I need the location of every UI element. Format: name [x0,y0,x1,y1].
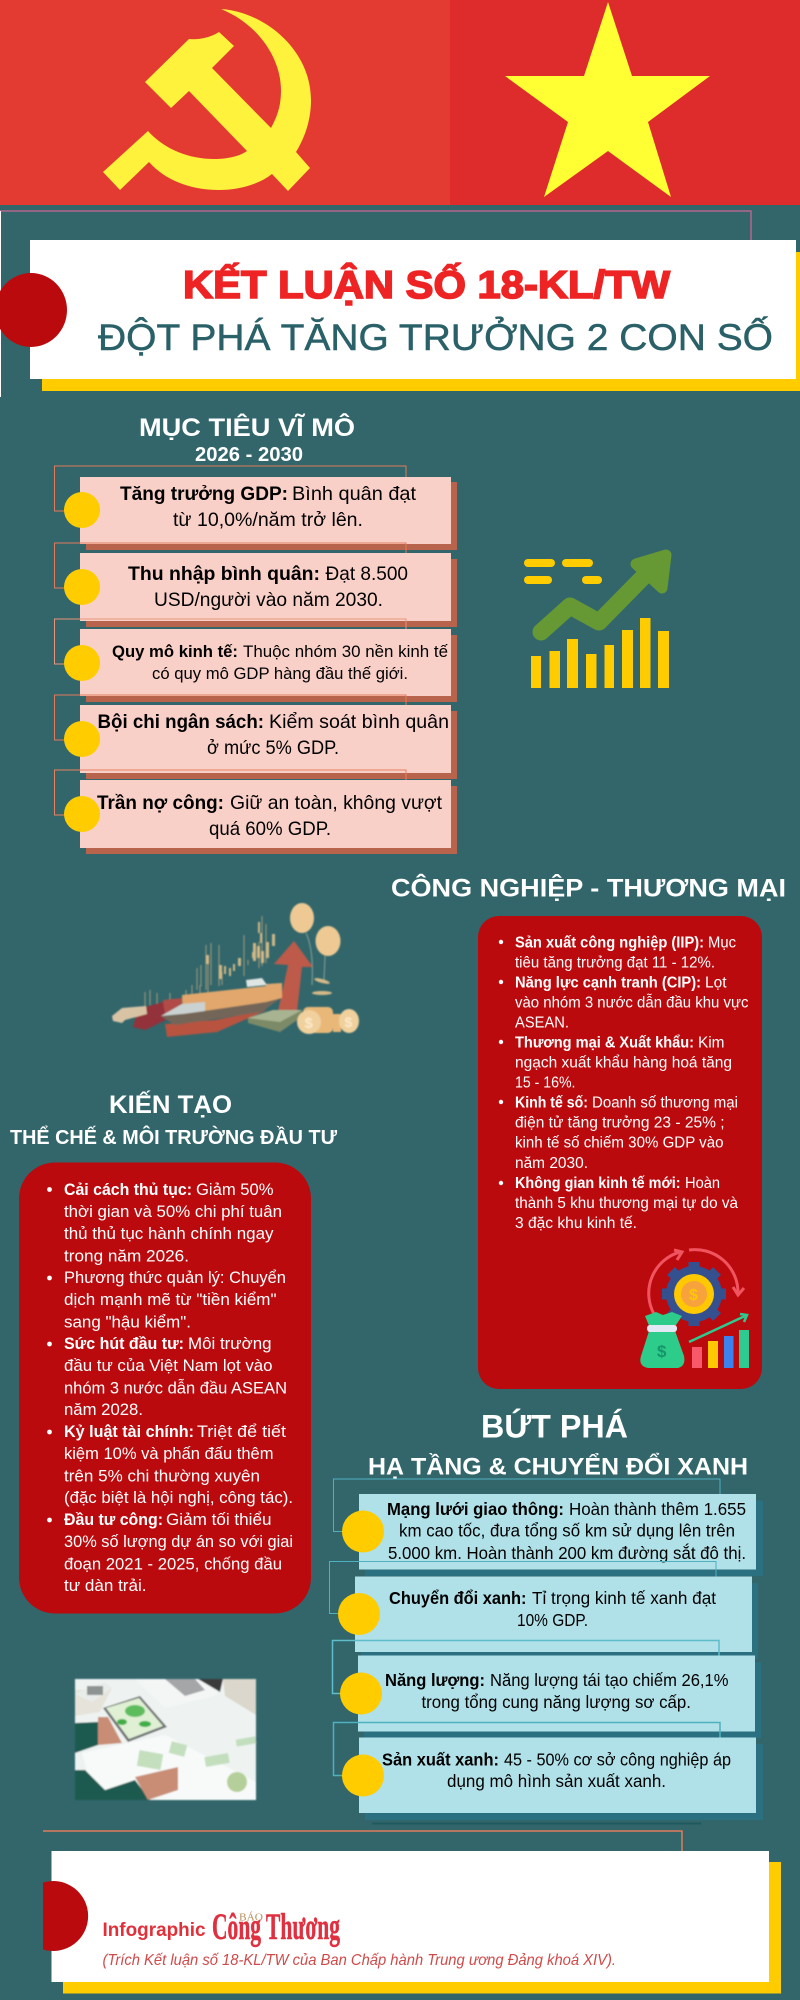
card: public debt ceiling: Giữ an toàn, không vượt [230,792,443,814]
title panel [0,211,800,397]
icon: yellow star [505,2,710,197]
panel: institutions and investment targets: Môi trường [188,1334,272,1353]
subtitle: ĐỘT PHÁ TĂNG TRƯỞNG 2 CON SỐ [98,316,773,358]
bullet list: tiêu tăng trưởng đạt 11 - 12%. [515,954,715,972]
card: green transition: Tỉ trọng kinh tế xanh đạt [532,1588,716,1608]
panel: institutions and investment targets: 30% số lượng dự án so với giai [64,1532,293,1551]
logo: Infographic Báo Công Thương: Công Thương [212,1907,340,1948]
card: GDP growth: từ 10,0%/năm trở lên. [173,509,363,531]
bullet list: Lọt [705,974,727,992]
panel: infrastructure cards [330,1479,763,1824]
panel: institutions and investment targets: Cải cách thủ tục: [64,1180,192,1199]
panel: institutions and investment targets: tư dàn trải. [64,1576,146,1595]
logo: Infographic Báo Công Thương: Infographic [102,1920,206,1941]
heading: industry and trade: CÔNG NGHIỆP - THƯƠNG MẠI [391,872,786,902]
heading: institutions and investment environment [10,1090,337,1149]
heading: infrastructure and green transition: HẠ TẦNG & CHUYỂN ĐỔI XANH [368,1452,748,1480]
panel: institutions and investment targets: nhóm 3 nước dẫn đầu ASEAN [64,1378,287,1398]
card: green production: 45 - 50% cơ sở công nghiệp áp [504,1750,731,1770]
card: green transition: 10% GDP. [517,1610,588,1630]
card: energy: Năng lượng tái tạo chiếm 26,1% [490,1670,728,1690]
bullet list: vào nhóm 3 nước dẫn đầu khu vực [515,994,749,1012]
heading: macro targets [139,412,355,466]
card: GDP growth: Tăng trưởng GDP: [120,483,288,505]
card: GDP growth [54,466,457,550]
card: energy: Năng lượng: [385,1670,485,1690]
panel: institutions and investment targets: thủ thủ tục hành chính ngay [64,1224,274,1243]
card: economy scale: Thuộc nhóm 30 nền kinh tế [243,642,449,661]
bullet list: Hoàn [685,1175,720,1192]
panel: institutions and investment targets: Phương thức quản lý: Chuyển [64,1268,286,1287]
heading: macro targets: 2026 - 2030 [195,444,303,466]
panel: institutions and investment targets: năm 2028. [64,1400,143,1419]
card: average income: Đạt 8.500 [326,563,408,585]
card: transport network [334,1479,763,1576]
card: transport network: Hoàn thành thêm 1.655 [569,1499,746,1519]
card: budget deficit: ở mức 5% GDP. [207,737,339,759]
bullet list: Năng lực cạnh tranh (CIP): [515,974,701,992]
icon: growth chart [524,555,669,688]
card: energy: trong tổng cung năng lượng sơ cấp. [422,1692,691,1712]
heading: infrastructure and green transition [368,1408,748,1480]
card: transport network: 5.000 km. Hoàn thành 200 km đường sắt đô thị. [388,1542,746,1563]
panel: institutions and investment targets: thời gian và 50% chi phí tuân [64,1202,282,1221]
bullet list: 15 - 16%. [515,1074,576,1092]
panel: institutions and investment targets: Triệt để tiết [197,1422,286,1441]
banner: party and national flags [0,0,800,205]
panel: institutions and investment targets: trong năm 2026. [64,1246,189,1266]
photo: hand holding phone over reports [75,1679,257,1800]
panel: institutions and investment targets: Đầu tư công: [64,1510,163,1529]
panel: institutions and investment targets: (đặc biệt là hội nghị, công tác). [64,1488,293,1507]
bullet list: Kim [698,1034,724,1052]
bullet list: ngạch xuất khẩu hàng hoá tăng [515,1054,732,1072]
card: public debt ceiling: Trần nợ công: [97,792,224,814]
heading: infrastructure and green transition: BỨT PHÁ [481,1408,628,1444]
card: average income: USD/người vào năm 2030. [154,589,383,611]
card: public debt ceiling [54,770,457,854]
card: green transition: Chuyển đổi xanh: [389,1588,526,1608]
panel: industry and trade targets [478,916,762,1389]
bullet list: Sản xuất công nghiệp (IIP): [515,934,704,952]
illustration: ship, arrow, balloons and coins: $ [304,1015,314,1032]
panel: footer source [43,1831,781,1994]
panel: institutions and investment targets: Giảm tối thiểu [166,1510,272,1529]
bullet list: thành 5 khu thương mại tự do và [515,1195,738,1212]
card: green production: dụng mô hình sản xuất xanh. [447,1771,666,1791]
bullet list: Thương mại & Xuất khẩu: [515,1034,694,1052]
card: green production: Sản xuất xanh: [382,1750,499,1770]
card: energy [332,1640,761,1738]
bullet list [499,934,749,1232]
card: average income: Thu nhập bình quân: [128,563,320,585]
card: budget deficit: Bội chi ngân sách: [98,711,264,733]
card: budget deficit: Kiểm soát bình quân [269,711,449,733]
panel: institutions and investment targets: Giảm 50% [196,1180,274,1199]
title: KẾT LUẬN SỐ 18-KL/TW [183,262,670,307]
card: green transition [330,1562,758,1659]
illustration: ship, arrow, balloons and coins: $ [344,1014,352,1030]
logo: Infographic Báo Công Thương [102,1907,340,1948]
card: transport network: km cao tốc, đưa tổng số km sử dụng lên trên [399,1520,735,1540]
card: green production [334,1722,763,1824]
panel: institutions and investment targets: dịch mạnh mẽ từ "tiền kiểm" [64,1290,276,1309]
panel: institutions and investment targets: trên 5% chi thường xuyên [64,1466,260,1486]
bullet list: kinh tế số chiếm 30% GDP vào [515,1134,724,1152]
card: public debt ceiling: quá 60% GDP. [209,818,331,840]
panel: institutions and investment targets: kiệm 10% và phấn đấu thêm [64,1444,274,1463]
card: economy scale [54,619,457,702]
panel: institutions and investment targets: Sức hút đầu tư: [64,1334,184,1353]
card: average income [54,543,457,627]
bullet list: Không gian kinh tế mới: [515,1175,680,1192]
bullet list: Doanh số thương mại [592,1094,738,1112]
card: budget deficit [54,695,457,779]
heading: macro targets: MỤC TIÊU VĨ MÔ [139,412,355,442]
panel: institutions and investment targets: Kỷ luật tài chính: [64,1422,194,1441]
panel: institutions and investment targets: sang "hậu kiểm". [64,1312,191,1332]
logo: Infographic Báo Công Thương: BÁO [239,1912,263,1924]
bullet list: ASEAN. [515,1014,569,1032]
icon: gear, money bag and bars: $ [657,1342,667,1361]
bullet list: điện tử tăng trưởng 23 - 25% ; [515,1114,724,1132]
panel: institutions and investment targets [19,1162,311,1614]
bullet list: Kinh tế số: [515,1094,588,1112]
panel: institutions and investment targets: đầu tư của Việt Nam lọt vào [64,1356,272,1375]
icon: gear, money bag and bars [640,1250,749,1368]
panel: institutions and investment targets: đoạn 2021 - 2025, chống đầu [64,1554,282,1574]
icon: gear, money bag and bars: $ [689,1287,698,1304]
card: transport network: Mạng lưới giao thông: [387,1499,564,1519]
panel: macro target cards [54,466,457,854]
heading: institutions and investment environment: THỂ CHẾ & MÔI TRƯỜNG ĐẦU TƯ [10,1125,337,1149]
icon: hammer and sickle [103,9,311,191]
source note: (Trích Kết luận số 18-KL/TW của Ban Chấp hành Trung ương Đảng khoá XIV). [102,1952,616,1969]
bullet list: 3 đặc khu kinh tế. [515,1215,637,1232]
card: economy scale: Quy mô kinh tế: [112,642,238,661]
bullet list: Mục [708,934,736,952]
bullet list: năm 2030. [515,1155,588,1172]
illustration: ship, arrow, balloons and coins [112,903,359,1037]
card: GDP growth: Bình quân đạt [292,483,417,505]
heading: institutions and investment environment: KIẾN TẠO [109,1090,232,1119]
card: economy scale: có quy mô GDP hàng đầu thế giới. [152,664,408,683]
